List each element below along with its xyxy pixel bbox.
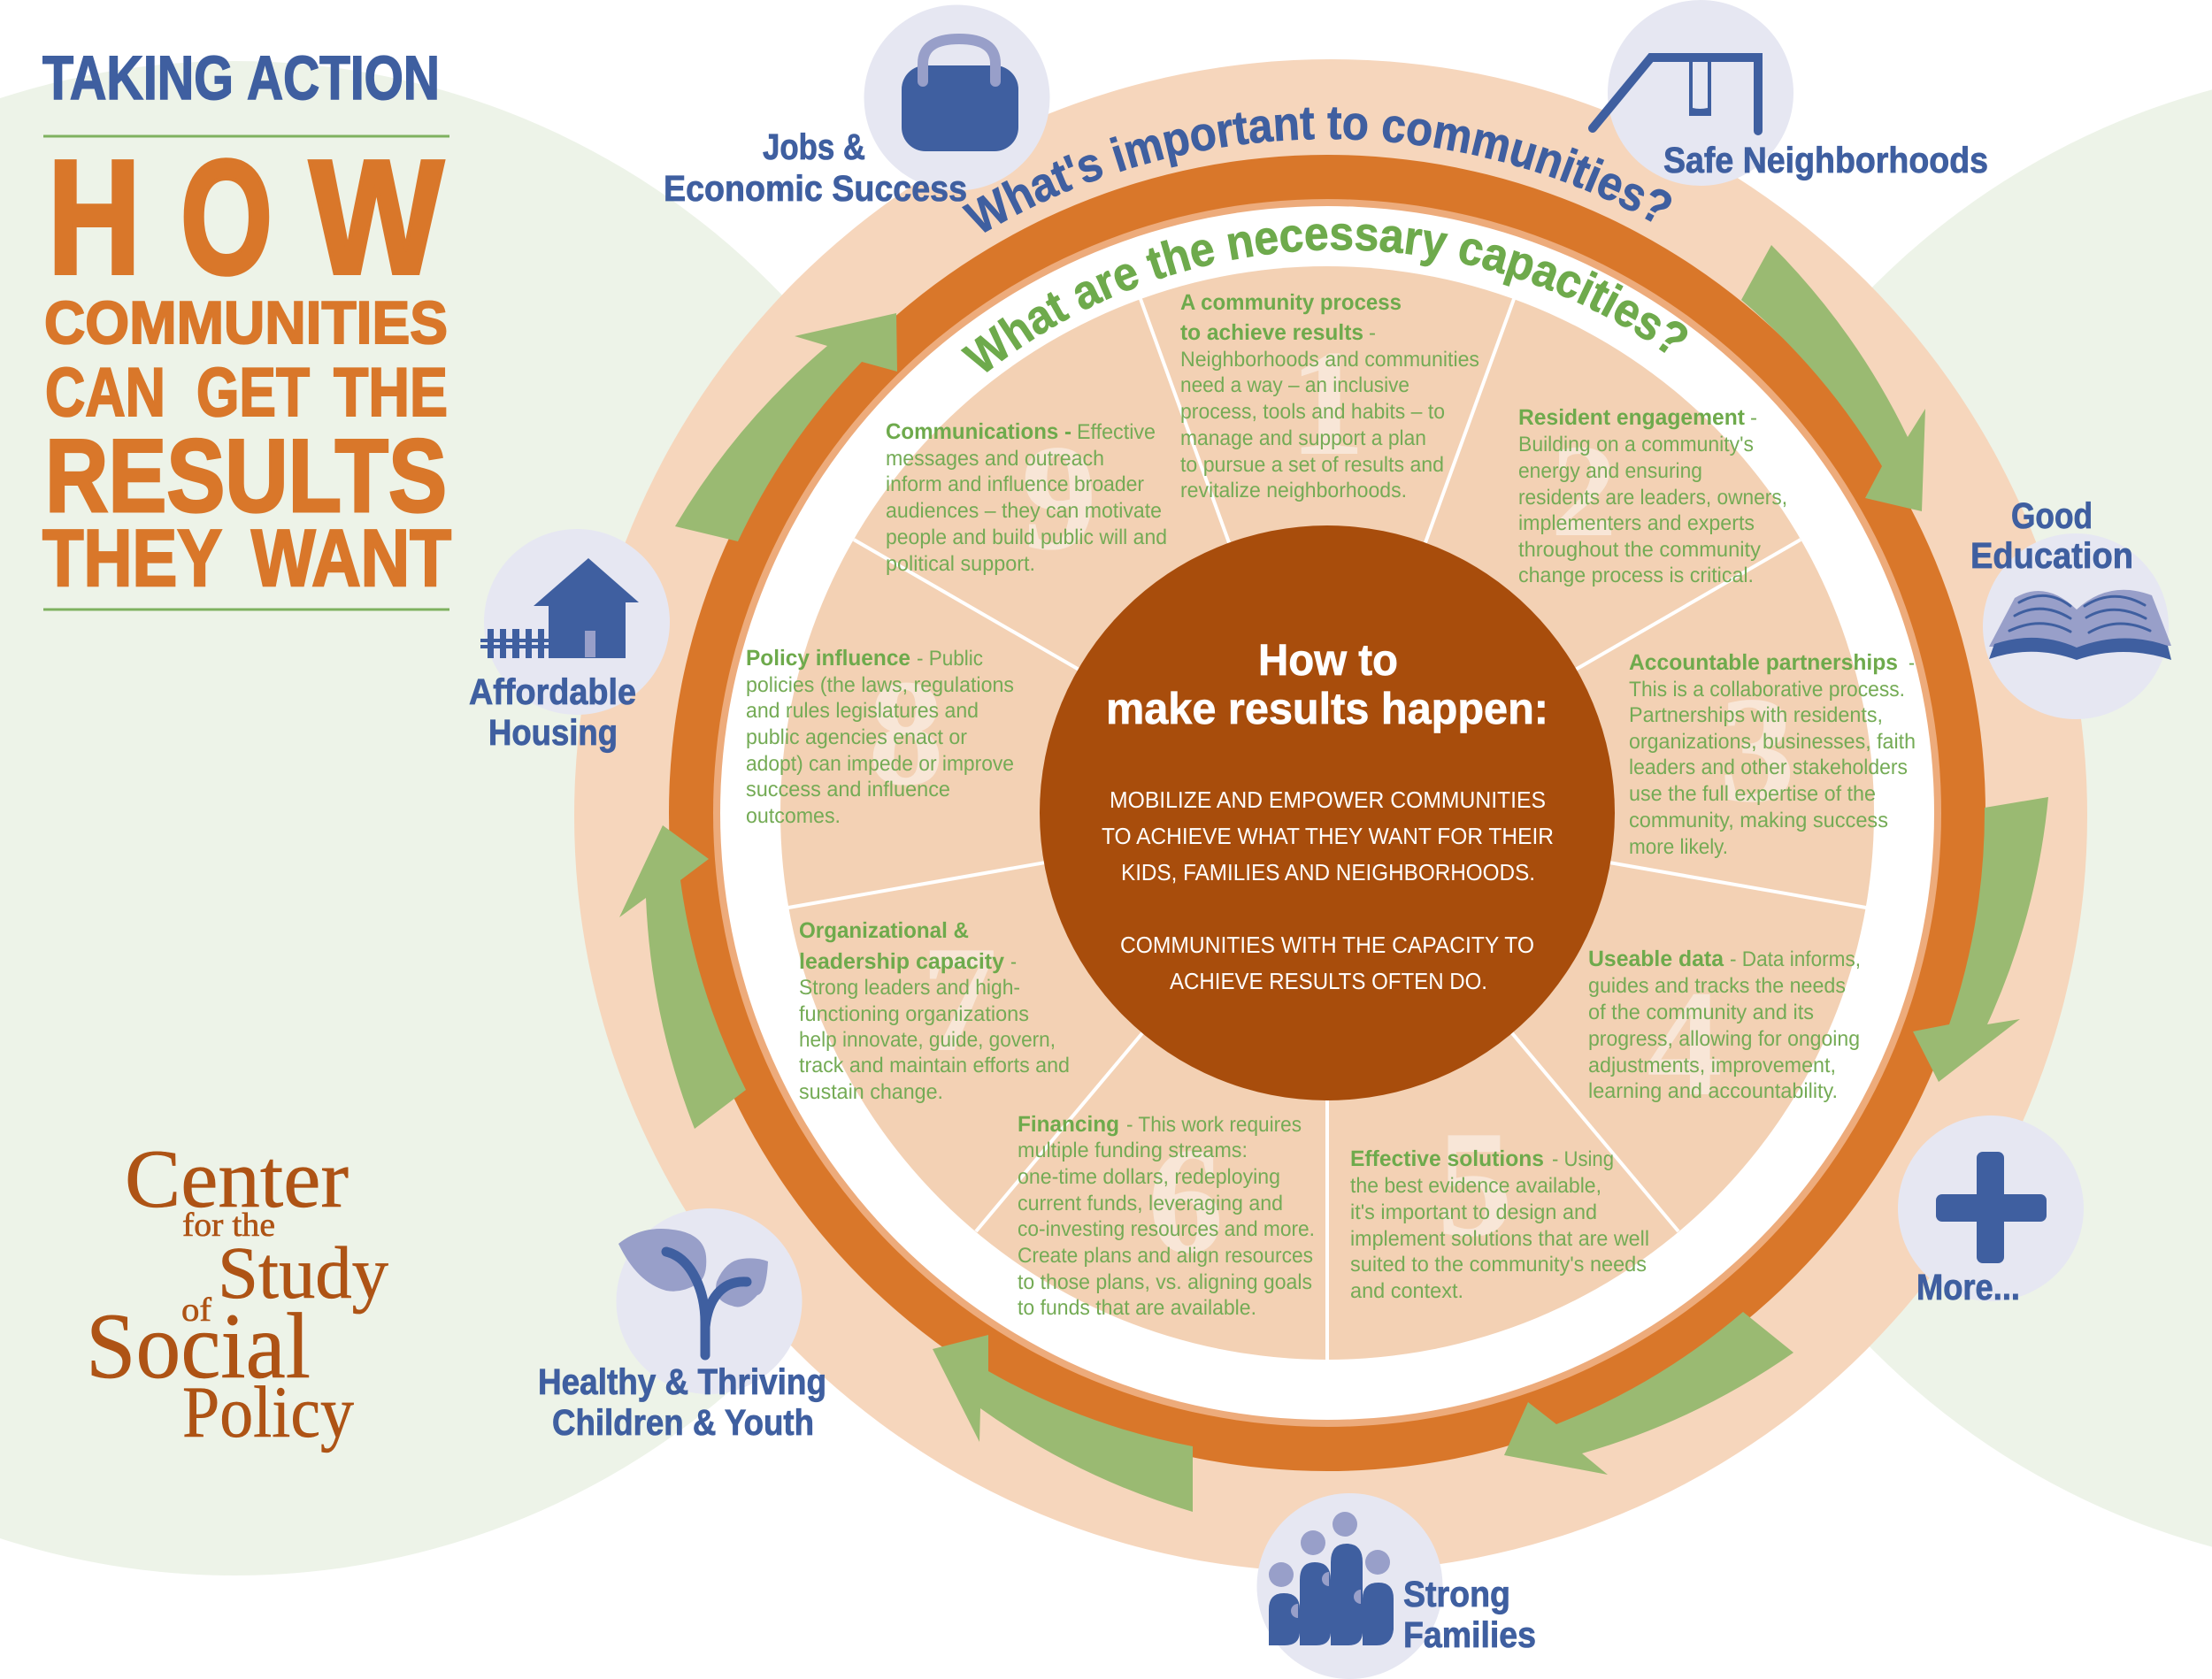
text: 1 community process: process, tools and habits – to	[1180, 400, 1445, 424]
text: 1 community process: -	[1369, 321, 1376, 345]
label: Jobs & Economic Success: Jobs &	[763, 126, 865, 167]
text: 7 organizational and leadership capacity: functioning organizations	[799, 1002, 1029, 1026]
text: 5 effective solutions: the best evidence available,	[1350, 1174, 1601, 1198]
text: 5 effective solutions: and context.	[1350, 1279, 1463, 1303]
center circle	[1040, 525, 1615, 1100]
text: 9 communications	[886, 419, 1167, 576]
kicker: Taking Action	[42, 43, 440, 112]
title block: THEY	[42, 514, 222, 603]
icon: house with fence	[480, 529, 670, 715]
arrow: top right	[1741, 245, 1925, 511]
text: 1 community process	[1180, 290, 1479, 502]
arrow: bottom left	[933, 1335, 1193, 1512]
logo: Center for the Study of Social Policy: of	[181, 1292, 211, 1329]
title block: O	[180, 126, 273, 308]
text: 4 useable data: Useable data	[1588, 947, 1724, 971]
text: 9 communications: messages and outreach	[886, 447, 1104, 471]
text: 7 organizational and leadership capacity: Organizational &	[799, 918, 969, 943]
title block: H	[48, 126, 141, 308]
arrow: top left	[675, 313, 897, 541]
kicker: Taking Action: ACTION	[247, 43, 440, 112]
curved heading: What's important to communities?: What's important to communities?	[962, 107, 1671, 233]
center circle: ACHIEVE RESULTS OFTEN DO.	[1170, 968, 1487, 994]
text: 7 organizational and leadership capacity: leadership capacity	[799, 949, 1004, 974]
title block: GET	[196, 353, 310, 431]
center circle: MOBILIZE AND EMPOWER COMMUNITIES	[1110, 786, 1546, 813]
icon: briefcase	[864, 5, 1049, 191]
label: Jobs & Economic Success	[664, 126, 967, 209]
text: 1 community process: to pursue a set of results and	[1180, 453, 1444, 477]
title block: RESULTS	[45, 418, 447, 533]
text: 8 policy influence: policies (the laws, regulations	[746, 673, 1014, 697]
capacity wheel: 1	[1289, 319, 1365, 487]
text: 6 financing	[1018, 1112, 1315, 1320]
text: 4 useable data	[1588, 947, 1861, 1103]
icon: sprout	[616, 1208, 802, 1394]
center circle: KIDS, FAMILIES AND NEIGHBORHOODS.	[1121, 859, 1535, 886]
capacity wheel: 6	[1148, 1117, 1224, 1285]
text: 7 organizational and leadership capacity	[799, 918, 1070, 1104]
label: Healthy & Thriving Children & Youth	[538, 1361, 826, 1443]
text: 9 communications: political support.	[886, 552, 1035, 576]
text: 7 organizational and leadership capacity: track and maintain efforts and	[799, 1054, 1070, 1077]
icon: family	[1256, 1493, 1442, 1679]
text: 5 effective solutions: it's important to design and	[1350, 1200, 1597, 1224]
text: 5 effective solutions: Effective solutions	[1350, 1146, 1544, 1171]
text: 8 policy influence: and rules legislatures and	[746, 699, 979, 723]
capacity wheel: 2	[1550, 418, 1617, 564]
label: Affordable Housing: Housing	[488, 712, 618, 753]
text: 3 accountable partnerships: This is a collaborative process.	[1629, 678, 1905, 702]
text: 9 communications: Communications -	[886, 419, 1071, 444]
orange ring	[669, 155, 1985, 1471]
label: Affordable Housing: Affordable	[469, 671, 636, 712]
text: 3 accountable partnerships: -	[1909, 651, 1915, 675]
text: 3 accountable partnerships: community, making success	[1629, 809, 1888, 832]
text: 4 useable data: adjustments, improvement,	[1588, 1054, 1836, 1077]
text: 1 community process: revitalize neighborhoods.	[1180, 479, 1407, 502]
label: Healthy & Thriving Children & Youth: Healthy & Thriving	[538, 1361, 826, 1402]
capacity wheel: 8	[868, 649, 944, 817]
text: 8 policy influence: - Public	[917, 647, 983, 671]
text: 2 resident engagement: -	[1750, 406, 1757, 430]
logo: Center for the Study of Social Policy: Center	[125, 1133, 349, 1225]
text: 4 useable data: of the community and its	[1588, 1000, 1814, 1024]
capacity wheel: 9	[1021, 414, 1097, 582]
capacity wheel: 5	[1437, 1100, 1513, 1269]
text: 2 resident engagement: change process is critical.	[1518, 564, 1754, 587]
title block: W	[310, 126, 443, 308]
text: 3 accountable partnerships	[1629, 650, 1916, 859]
text: 3 accountable partnerships: more likely.	[1629, 835, 1728, 859]
text: 8 policy influence: public agencies enact or	[746, 725, 967, 749]
title block: COMMUNITIES	[44, 289, 448, 356]
text: 3 accountable partnerships: Accountable partnerships	[1629, 650, 1898, 675]
center circle: TO ACHIEVE WHAT THEY WANT FOR THEIR	[1102, 823, 1554, 849]
title block: WANT	[251, 514, 451, 603]
curved heading: What are the necessary capacities?: What are the necessary capacities?	[961, 223, 1688, 372]
text: 1 community process: to achieve results	[1180, 320, 1363, 345]
kicker: Taking Action: TAKING	[42, 43, 234, 112]
text: 9 communications: audiences – they can motivate	[886, 499, 1162, 523]
center circle: COMMUNITIES WITH THE CAPACITY TO	[1120, 932, 1534, 958]
text: 6 financing: to funds that are available.	[1018, 1296, 1256, 1320]
capacity wheel: 4	[1647, 960, 1723, 1128]
capacity wheel	[780, 266, 1874, 1360]
text: 8 policy influence	[746, 646, 1014, 828]
text: 2 resident engagement: implementers and experts	[1518, 511, 1755, 535]
center circle: make results happen:	[1106, 684, 1548, 733]
text: 1 community process: Neighborhoods and communities	[1180, 348, 1479, 372]
arrow: right	[1913, 797, 2048, 1082]
text: 9 communications: people and build public will and	[886, 525, 1167, 549]
text: 2 resident engagement: Resident engagement	[1518, 405, 1746, 430]
logo: Center for the Study of Social Policy: Study	[218, 1232, 388, 1315]
text: 8 policy influence: Policy influence	[746, 646, 910, 671]
title block: CAN	[45, 353, 165, 431]
label: Healthy & Thriving Children & Youth: Children & Youth	[552, 1402, 814, 1443]
label: Strong Families: Strong	[1403, 1574, 1510, 1614]
text: 7 organizational and leadership capacity: sustain change.	[799, 1080, 943, 1104]
logo: Center for the Study of Social Policy: for the	[182, 1207, 275, 1244]
text: 1 community process: need a way – an inclusive	[1180, 373, 1409, 397]
title block: THE	[334, 353, 448, 431]
arrow: left	[619, 825, 746, 1129]
icon: swing set	[1593, 0, 1793, 186]
text: 8 policy influence: adopt) can impede or improve	[746, 752, 1014, 776]
text: 6 financing: co-investing resources and more.	[1018, 1217, 1315, 1241]
text: 7 organizational and leadership capacity: Strong leaders and high-	[799, 976, 1020, 1000]
label: Strong Families: Families	[1403, 1614, 1536, 1655]
text: 5 effective solutions	[1350, 1146, 1649, 1303]
text: 6 financing: multiple funding streams:	[1018, 1138, 1248, 1162]
logo: Center for the Study of Social Policy	[86, 1133, 388, 1453]
label: Good Education: Education	[1970, 535, 2133, 576]
text: 4 useable data: progress, allowing for ongoing	[1588, 1027, 1860, 1051]
center circle: How to	[1258, 635, 1398, 685]
label: Jobs & Economic Success: Economic Success	[664, 168, 967, 209]
text: 2 resident engagement: throughout the community	[1518, 538, 1761, 562]
label: More: More...	[1916, 1267, 2020, 1307]
text: 1 community process: A community process	[1180, 290, 1402, 315]
text: 6 financing: Financing	[1018, 1112, 1119, 1137]
text: 6 financing: one-time dollars, redeploying	[1018, 1165, 1280, 1189]
text: 7 organizational and leadership capacity: help innovate, guide, govern,	[799, 1028, 1056, 1052]
capacity wheel: 7	[921, 916, 997, 1084]
text: 6 financing: current funds, leveraging and	[1018, 1192, 1283, 1215]
text: 2 resident engagement: energy and ensuring	[1518, 459, 1702, 483]
label: Safe Neighborhoods: Safe Neighborhoods	[1663, 140, 1988, 180]
text: 5 effective solutions: implement solutions that are well	[1350, 1227, 1649, 1251]
text: 2 resident engagement: residents are leaders, owners,	[1518, 486, 1787, 510]
text: 3 accountable partnerships: leaders and other stakeholders	[1629, 755, 1908, 779]
background circle right	[1654, 64, 2212, 1573]
label: Good Education	[1970, 495, 2133, 576]
label: Strong Families	[1403, 1574, 1536, 1655]
outer peach ring	[574, 59, 2087, 1572]
text: 9 communications: Effective	[1077, 420, 1156, 444]
text: 4 useable data: - Data informs,	[1730, 947, 1861, 971]
text: 6 financing: to those plans, vs. aligning goals	[1018, 1270, 1312, 1294]
text: 8 policy influence: success and influence	[746, 778, 950, 801]
light orange ring	[713, 199, 1941, 1427]
arrow: bottom right	[1504, 1312, 1793, 1475]
text: 8 policy influence: outcomes.	[746, 804, 841, 828]
capacity wheel: 3	[1719, 666, 1795, 834]
text: 7 organizational and leadership capacity: -	[1010, 950, 1017, 974]
text: 3 accountable partnerships: use the full expertise of the	[1629, 782, 1876, 806]
text: 1 community process: manage and support a plan	[1180, 426, 1426, 450]
text: 5 effective solutions: suited to the community's needs	[1350, 1253, 1647, 1276]
logo: Center for the Study of Social Policy: Policy	[182, 1371, 354, 1453]
white ring	[720, 206, 1934, 1420]
text: 2 resident engagement	[1518, 405, 1787, 587]
label: Affordable Housing	[469, 671, 636, 753]
text: 3 accountable partnerships: organizations, businesses, faith	[1629, 730, 1916, 754]
text: 6 financing: Create plans and align resources	[1018, 1244, 1313, 1268]
text: 4 useable data: learning and accountability.	[1588, 1079, 1838, 1103]
text: 4 useable data: guides and tracks the needs	[1588, 974, 1846, 998]
text: 3 accountable partnerships: Partnerships with residents,	[1629, 703, 1883, 727]
text: 9 communications: inform and influence broader	[886, 472, 1144, 496]
background circle left	[0, 61, 992, 1576]
logo: Center for the Study of Social Policy: Social	[86, 1294, 311, 1398]
text: 5 effective solutions: - Using	[1552, 1147, 1614, 1171]
icon: open book	[1983, 533, 2171, 719]
text: 2 resident engagement: Building on a community's	[1518, 433, 1754, 456]
title block	[42, 126, 451, 610]
icon: plus	[1898, 1116, 2084, 1301]
text: 6 financing: - This work requires	[1126, 1113, 1302, 1137]
label: Good Education: Good	[2011, 495, 2093, 536]
